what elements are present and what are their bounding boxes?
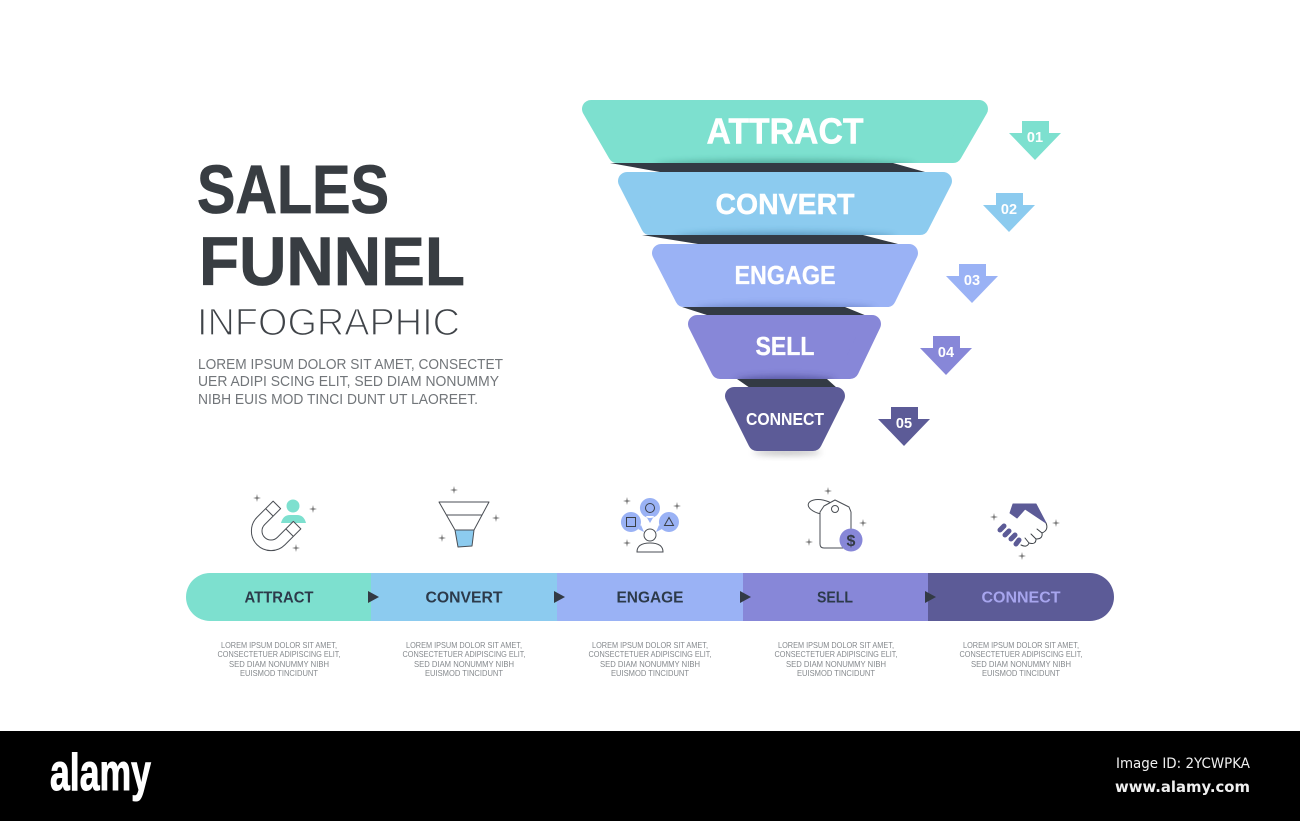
description: connect: EUISMOD TINCIDUNT [982, 668, 1060, 678]
arrow 01 [1009, 121, 1061, 160]
funnel layer: engage: ENGAGE [734, 260, 836, 290]
description: convert [402, 640, 526, 678]
arrow 03 [946, 264, 998, 303]
arrow 04: 04 [938, 345, 954, 361]
footer band [0, 731, 1300, 821]
icon: price tag with dollar: $ [847, 533, 856, 550]
funnel layer: attract [591, 109, 979, 170]
bar segments [186, 573, 1114, 621]
arrow 01: 01 [1027, 130, 1043, 146]
description: convert: SED DIAM NONUMMY NIBH [414, 659, 514, 669]
bar labels: CONVERT [426, 590, 503, 606]
description: connect: SED DIAM NONUMMY NIBH [971, 659, 1071, 669]
bar labels [244, 590, 1061, 606]
arrow 04 [920, 336, 972, 375]
bar labels: CONNECT [982, 590, 1061, 606]
icon: magnet attracting person [243, 494, 317, 559]
intro text [198, 357, 503, 408]
icon row [243, 486, 1060, 560]
bar labels: SELL [817, 590, 853, 606]
description: engage: SED DIAM NONUMMY NIBH [600, 659, 700, 669]
description: sell [774, 640, 898, 678]
arrow 02 [983, 193, 1035, 232]
funnel bottom shadow [753, 449, 821, 455]
description: connect: CONSECTETUER ADIPISCING ELIT, [960, 649, 1082, 659]
process bar [186, 573, 1114, 621]
funnel layer: connect [734, 396, 836, 442]
description: sell: EUISMOD TINCIDUNT [797, 668, 875, 678]
heading: sales: SALES [197, 151, 389, 228]
description: attract [218, 640, 340, 678]
description: sell: LOREM IPSUM DOLOR SIT AMET, [778, 640, 894, 650]
bar labels: ENGAGE [616, 590, 684, 606]
funnel layer: sell [697, 324, 872, 386]
footer brand name: alamy [50, 744, 151, 802]
funnel diagram [591, 109, 979, 455]
icon: price tag with dollar [805, 487, 867, 552]
funnel layer: convert: CONVERT [716, 189, 855, 221]
icon: person with speech bubbles [621, 497, 681, 552]
description: attract: SED DIAM NONUMMY NIBH [229, 659, 329, 669]
description: connect [960, 640, 1082, 678]
intro text: LOREM IPSUM DOLOR SIT AMET, CONSECTET [198, 357, 503, 373]
funnel layer: engage [661, 253, 909, 314]
bar labels: ATTRACT [244, 590, 314, 606]
description: engage: CONSECTETUER ADIPISCING ELIT, [588, 649, 712, 659]
description: sell: CONSECTETUER ADIPISCING ELIT, [774, 649, 898, 659]
description: attract: EUISMOD TINCIDUNT [240, 668, 318, 678]
arrow 03: 03 [964, 273, 980, 289]
description: engage: LOREM IPSUM DOLOR SIT AMET, [592, 640, 708, 650]
bar arrows [368, 591, 936, 603]
title block [197, 151, 503, 408]
step number arrows [878, 121, 1061, 446]
description: convert: CONSECTETUER ADIPISCING ELIT, [402, 649, 526, 659]
step descriptions [218, 640, 1082, 678]
funnel layer: attract: ATTRACT [706, 110, 864, 152]
description: connect: LOREM IPSUM DOLOR SIT AMET, [963, 640, 1079, 650]
footer image id: Image ID: 2YCWPKA [1116, 756, 1250, 772]
description: engage [588, 640, 712, 678]
funnel layer: connect: CONNECT [746, 409, 824, 429]
description: sell: SED DIAM NONUMMY NIBH [786, 659, 886, 669]
icon: handshake [990, 504, 1060, 560]
description: attract: LOREM IPSUM DOLOR SIT AMET, [221, 640, 337, 650]
description: convert: LOREM IPSUM DOLOR SIT AMET, [406, 640, 522, 650]
arrow 05 [878, 407, 930, 446]
heading: funnel: FUNNEL [199, 223, 465, 300]
dark folds between funnel layers [610, 163, 925, 388]
description: attract: CONSECTETUER ADIPISCING ELIT, [218, 649, 340, 659]
arrow 02: 02 [1001, 202, 1017, 218]
subheading: infographic: INFOGRAPHIC [197, 302, 460, 344]
icon: funnel [438, 486, 500, 547]
funnel layer: sell: SELL [756, 331, 815, 361]
description: engage: EUISMOD TINCIDUNT [611, 668, 689, 678]
description: convert: EUISMOD TINCIDUNT [425, 668, 503, 678]
intro text: UER ADIPI SCING ELIT, SED DIAM NONUMMY [198, 374, 499, 390]
funnel layer: convert [627, 181, 943, 242]
intro text: NIBH EUIS MOD TINCI DUNT UT LAOREET. [198, 392, 478, 408]
arrow 05: 05 [896, 416, 912, 432]
footer url: www.alamy.com [1115, 778, 1250, 796]
